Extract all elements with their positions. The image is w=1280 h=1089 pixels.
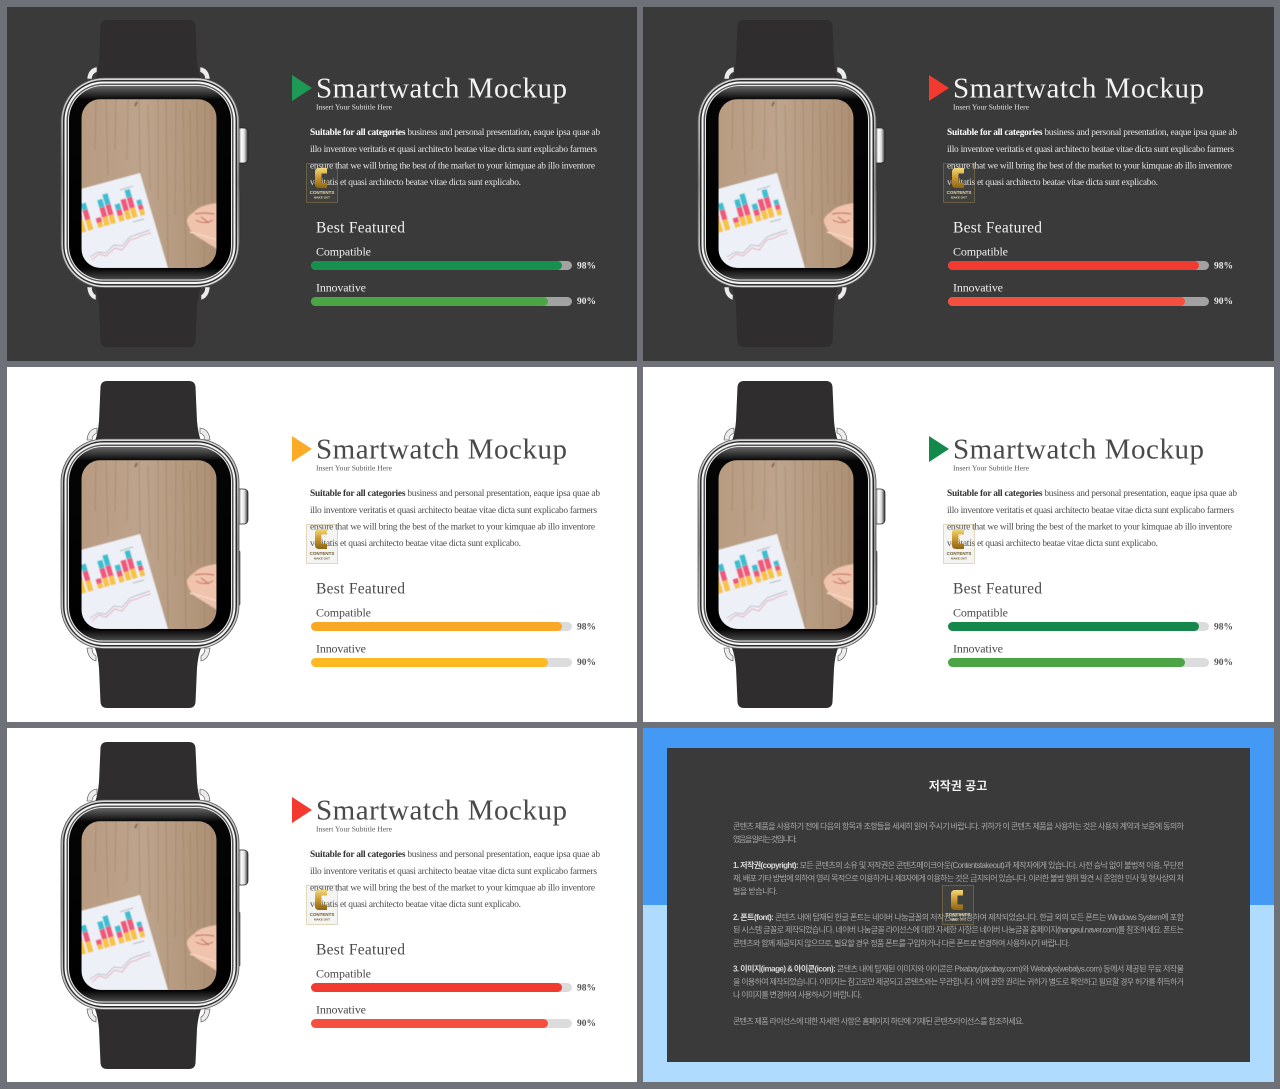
icon: red title triangle xyxy=(929,75,949,101)
icon: watermark: CONTENTS xyxy=(310,912,334,917)
body text: illo inventore veritatis et quasi architecto beatae vitae dicta sunt explicabo farmers xyxy=(947,505,1234,516)
text block: copyright terms: 2. 폰트(font): 콘텐츠 내에 탑재된 한글 폰트는 네이버 나눔글꼴의 저작권을 이용하여 제작되었습니다. 한글 외의 모든 폰트는 Windows System에 포함 xyxy=(733,912,1185,922)
bar: compatible 98%: Compatible xyxy=(953,606,1008,620)
icon: smartwatch mockup xyxy=(61,20,248,347)
panel: white slide, red xyxy=(7,728,637,1082)
body text: illo inventore veritatis et quasi architecto beatae vitae dicta sunt explicabo farmers xyxy=(310,505,597,516)
panel: dark slide, red xyxy=(643,7,1274,361)
bar: compatible 98%: Compatible xyxy=(316,244,371,258)
icon: watermark xyxy=(306,164,338,202)
icon: watermark: MAKE OUT xyxy=(950,918,966,922)
bar: innovative 90%: 90% xyxy=(577,1019,596,1029)
text block: copyright terms: 1. 저작권(copyright): 모든 콘텐츠의 소유 및 저작권은 콘텐츠메이크아웃(Contentstakeout)과 제작자에게 있습니다. 사전 승낙 없이 불법적 이용, 무단전 xyxy=(733,860,1184,870)
heading: best featured: Best Featured xyxy=(316,580,405,598)
subtitle: Insert Your Subtitle Here xyxy=(953,102,1030,112)
subtitle: Insert Your Subtitle Here xyxy=(316,824,393,834)
bar: compatible 98%: 98% xyxy=(577,622,596,632)
icon: orange title triangle xyxy=(292,436,312,462)
bar: compatible 98% xyxy=(948,606,1233,632)
bar: compatible 98% xyxy=(948,244,1233,272)
text block: copyright terms: 재, 배포 기타 방법에 의하여 영리 목적으로 이용하거나 제3자에게 이용하는 것은 금지되어 있습니다. 이러한 불법 행위 발견 시 준엄한 민사 및 형사상의 처 xyxy=(733,873,1184,883)
icon: smartwatch mockup xyxy=(698,381,885,708)
body text: veritatis et quasi architecto beatae vitae dicta sunt explicabo. xyxy=(310,539,521,549)
icon: watermark xyxy=(306,524,338,564)
bar: innovative 90%: 90% xyxy=(577,658,596,668)
body text: Suitable for all categories business and personal presentation, eaque ipsa quae ab xyxy=(947,489,1237,499)
panel: dark slide, green xyxy=(7,7,637,361)
body text: illo inventore veritatis et quasi architecto beatae vitae dicta sunt explicabo farmers xyxy=(310,866,597,877)
bar: innovative 90%: Innovative xyxy=(953,280,1003,294)
body text: ensure that we will bring the best of the market to your kimquae ab illo inventore xyxy=(310,160,595,172)
body text: ensure that we will bring the best of the market to your kimquae ab illo inventore xyxy=(310,522,595,532)
text block: copyright terms: 나 이미지를 변경하여 사용하시기 바랍니다. xyxy=(733,990,862,1000)
text block: copyright terms: 3. 이미지(image) & 아이콘(icon): 콘텐츠 내에 탑재된 이미지와 아이콘은 Pixabay(pixabay.com)와 Webalys(webalys.com) 등에서 제공된 무료 저작물 xyxy=(733,964,1184,974)
icon: watermark: MAKE OUT xyxy=(951,556,967,560)
panel: white slide, green xyxy=(643,367,1274,722)
icon: green title triangle xyxy=(929,436,949,462)
text block: copyright terms: 콘텐츠 제품을 사용하기 전에 다음의 항목과 조항들을 세세히 읽어 주시기 바랍니다. 귀하가 이 콘텐츠 제품을 사용하는 것은 사용자 계약과 보증에 동의하 xyxy=(733,821,1185,831)
heading: best featured: Best Featured xyxy=(316,942,405,958)
bar: compatible 98% xyxy=(311,244,596,272)
subtitle: Insert Your Subtitle Here xyxy=(316,464,393,472)
heading: best featured: Best Featured xyxy=(953,580,1042,598)
bar: compatible 98%: 98% xyxy=(1214,622,1233,632)
bar: innovative 90% xyxy=(311,1002,596,1029)
icon: watermark xyxy=(306,886,338,924)
icon: watermark: CONTENTS xyxy=(946,912,970,917)
body text xyxy=(310,489,600,549)
text block: copyright terms xyxy=(733,821,1185,1026)
icon: watermark xyxy=(944,524,974,564)
body text xyxy=(947,128,1237,188)
title: Smartwatch Mockup xyxy=(953,72,1204,104)
bar: innovative 90%: Innovative xyxy=(316,642,366,656)
body text: ensure that we will bring the best of the market to your kimquae ab illo inventore xyxy=(947,522,1232,532)
panel: copyright notice xyxy=(643,728,1274,1082)
text block: copyright terms: 된 시스템 글꼴로 제작되었습니다. 네이버 나눔글꼴 라이선스에 대한 자세한 사항은 네이버 나눔글꼴 홈페이지(hangeul.naver.com)를 참조하세요. 폰트는 xyxy=(733,924,1184,934)
icon: watermark: MAKE OUT xyxy=(951,196,967,200)
panel: white slide, orange xyxy=(7,367,637,722)
body text: veritatis et quasi architecto beatae vitae dicta sunt explicabo. xyxy=(947,539,1158,549)
body text xyxy=(310,128,600,188)
title: Smartwatch Mockup xyxy=(316,794,567,826)
icon: watermark: MAKE OUT xyxy=(314,196,330,200)
bar: innovative 90% xyxy=(311,280,596,307)
bar: compatible 98%: Compatible xyxy=(953,244,1008,258)
icon: smartwatch mockup xyxy=(698,20,885,347)
body text: illo inventore veritatis et quasi architecto beatae vitae dicta sunt explicabo farmers xyxy=(947,144,1234,155)
subtitle: Insert Your Subtitle Here xyxy=(953,464,1030,472)
bar: innovative 90%: 90% xyxy=(577,297,596,307)
text block: copyright terms: 였음을 알리는 것입니다. xyxy=(733,834,797,844)
bar: innovative 90%: Innovative xyxy=(316,1002,366,1016)
bar: compatible 98%: 98% xyxy=(1214,262,1233,272)
bar: innovative 90% xyxy=(948,280,1233,307)
bar: compatible 98% xyxy=(311,606,596,632)
body text: Suitable for all categories business and personal presentation, eaque ipsa quae ab xyxy=(310,489,600,499)
icon: watermark: CONTENTS xyxy=(947,551,971,556)
icon: smartwatch mockup xyxy=(61,742,248,1069)
icon: watermark xyxy=(944,164,974,202)
body text xyxy=(310,850,600,910)
icon: watermark: CONTENTS xyxy=(947,190,971,195)
heading: best featured: Best Featured xyxy=(316,220,405,236)
icon: watermark: CONTENTS xyxy=(310,551,334,556)
icon: watermark: MAKE OUT xyxy=(314,918,330,922)
bar: compatible 98%: 98% xyxy=(577,262,596,272)
heading: best featured: Best Featured xyxy=(953,220,1042,236)
icon: watermark xyxy=(942,886,974,924)
body text: ensure that we will bring the best of the market to your kimquae ab illo inventore xyxy=(310,882,595,894)
icon: watermark: MAKE OUT xyxy=(314,556,330,560)
body text: illo inventore veritatis et quasi architecto beatae vitae dicta sunt explicabo farmers xyxy=(310,144,597,155)
bar: innovative 90%: 90% xyxy=(1214,658,1233,668)
text block: copyright terms: 벌을 받습니다. xyxy=(733,886,778,896)
icon: red title triangle xyxy=(292,797,312,823)
icon: smartwatch mockup xyxy=(61,381,248,708)
text block: copyright terms: 콘텐츠 제품 라이선스에 대한 자세한 사항은 홈페이지 하단에 기재된 콘텐츠라이선스를 참조하세요. xyxy=(733,1016,1024,1026)
bar: innovative 90%: Innovative xyxy=(316,280,366,294)
bar: compatible 98%: 98% xyxy=(577,984,596,994)
text block: copyright terms: 을 이용하여 제작되었습니다. 이미지는 참고로만 제공되고 콘텐츠와는 무관합니다. 이에 관한 권리는 귀하가 별도로 확인하고 필요할 경우 허가를 취득하거 xyxy=(733,976,1184,986)
bar: innovative 90% xyxy=(948,642,1233,668)
bar: innovative 90%: 90% xyxy=(1214,297,1233,307)
body text: veritatis et quasi architecto beatae vitae dicta sunt explicabo. xyxy=(947,178,1158,188)
title: Smartwatch Mockup xyxy=(316,72,567,104)
title: Smartwatch Mockup xyxy=(316,434,567,466)
subtitle: Insert Your Subtitle Here xyxy=(316,102,393,112)
body text: ensure that we will bring the best of the market to your kimquae ab illo inventore xyxy=(947,160,1232,172)
heading: copyright notice: 저작권 공고 xyxy=(929,778,987,793)
body text: veritatis et quasi architecto beatae vitae dicta sunt explicabo. xyxy=(310,178,521,188)
body text xyxy=(947,489,1237,549)
bar: innovative 90% xyxy=(311,642,596,668)
icon: green title triangle xyxy=(292,75,312,101)
bar: compatible 98%: Compatible xyxy=(316,966,371,980)
text block: copyright terms: 콘텐츠와 함께 제공되지 않으므로, 필요할 경우 정품 폰트를 구입하거나 다른 폰트로 변경하여 사용하시기 바랍니다. xyxy=(733,938,1070,948)
body text: Suitable for all categories business and personal presentation, eaque ipsa quae ab xyxy=(947,128,1237,138)
body text: Suitable for all categories business and personal presentation, eaque ipsa quae ab xyxy=(310,850,600,860)
icon: watermark: CONTENTS xyxy=(310,190,334,195)
bar: innovative 90%: Innovative xyxy=(953,642,1003,656)
body text: Suitable for all categories business and personal presentation, eaque ipsa quae ab xyxy=(310,128,600,138)
bar: compatible 98% xyxy=(311,966,596,994)
body text: veritatis et quasi architecto beatae vitae dicta sunt explicabo. xyxy=(310,900,521,910)
title: Smartwatch Mockup xyxy=(953,434,1204,466)
bar: compatible 98%: Compatible xyxy=(316,606,371,620)
